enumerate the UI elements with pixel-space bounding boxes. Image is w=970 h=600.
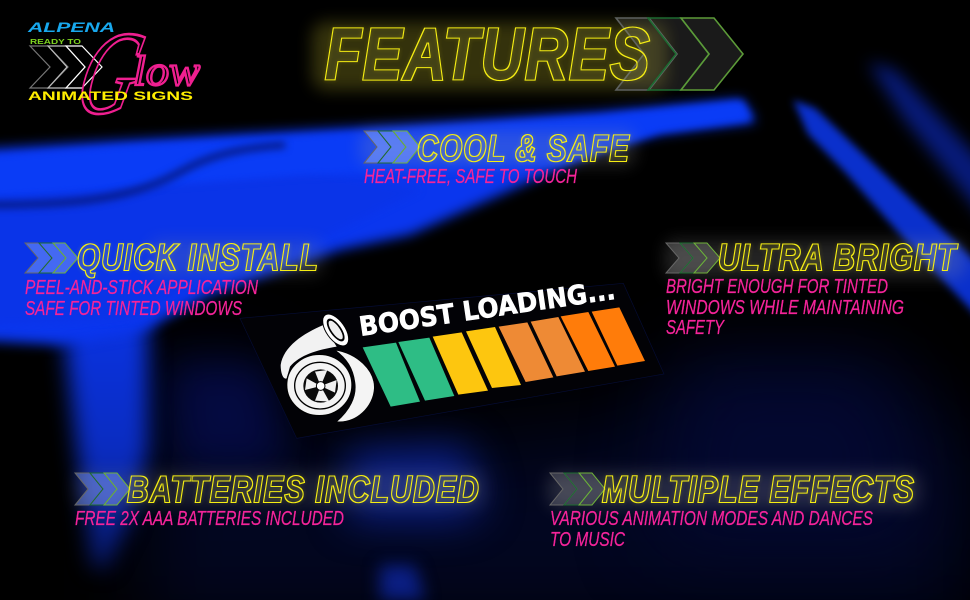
- feature: cool and safe: [360, 128, 635, 188]
- heading: BATTERIES INCLUDED: [127, 469, 480, 510]
- feature: quick install: [25, 237, 323, 320]
- sign text: BOOST LOADING...: [357, 275, 617, 343]
- feature: multiple effects: [548, 469, 920, 551]
- icon: turbocharger: [281, 310, 374, 422]
- progress bars: [363, 307, 645, 407]
- heading: QUICK INSTALL: [77, 237, 319, 278]
- description: VARIOUS ANIMATION MODES AND DANCES: [550, 507, 873, 530]
- sign plate: [240, 283, 664, 438]
- glow: [548, 472, 920, 508]
- title: FEATURES: [312, 15, 743, 95]
- chevrons: [550, 473, 605, 505]
- glow: [665, 240, 965, 278]
- glow: [75, 471, 485, 507]
- glow: [150, 240, 323, 276]
- description: FREE 2X AAA BATTERIES INCLUDED: [75, 507, 344, 530]
- chevrons: [75, 473, 130, 505]
- logo brand name: ALPENA: [26, 19, 115, 35]
- chevrons: [364, 131, 420, 163]
- feature: batteries included: [75, 469, 485, 530]
- feature: ultra bright: [665, 237, 965, 339]
- description: TO MUSIC: [550, 528, 625, 551]
- glow: [360, 130, 635, 166]
- logo tagline: READY TO: [30, 39, 82, 46]
- description: WINDOWS WHILE MAINTAINING: [666, 296, 904, 319]
- title text: FEATURES: [325, 15, 651, 95]
- description: PEEL-AND-STICK APPLICATION: [25, 276, 258, 299]
- sign: boost loading: [240, 275, 664, 438]
- description: HEAT-FREE, SAFE TO TOUCH: [364, 165, 577, 188]
- title glow: [312, 22, 667, 90]
- title chevrons: [616, 18, 743, 90]
- logo script word: low: [133, 49, 200, 95]
- logo: Alpena Ready to Glow Animated Signs: [26, 8, 200, 139]
- chevrons: [25, 243, 78, 273]
- description: BRIGHT ENOUGH FOR TINTED: [666, 275, 888, 298]
- description: SAFETY: [666, 316, 725, 339]
- chevrons: [666, 243, 720, 273]
- logo product name: ANIMATED SIGNS: [28, 89, 193, 103]
- logo script word: G: [65, 8, 156, 139]
- heading: COOL & SAFE: [417, 128, 630, 169]
- logo chevrons: [30, 46, 102, 88]
- logo script word: [65, 8, 200, 139]
- description: SAFE FOR TINTED WINDOWS: [25, 297, 242, 320]
